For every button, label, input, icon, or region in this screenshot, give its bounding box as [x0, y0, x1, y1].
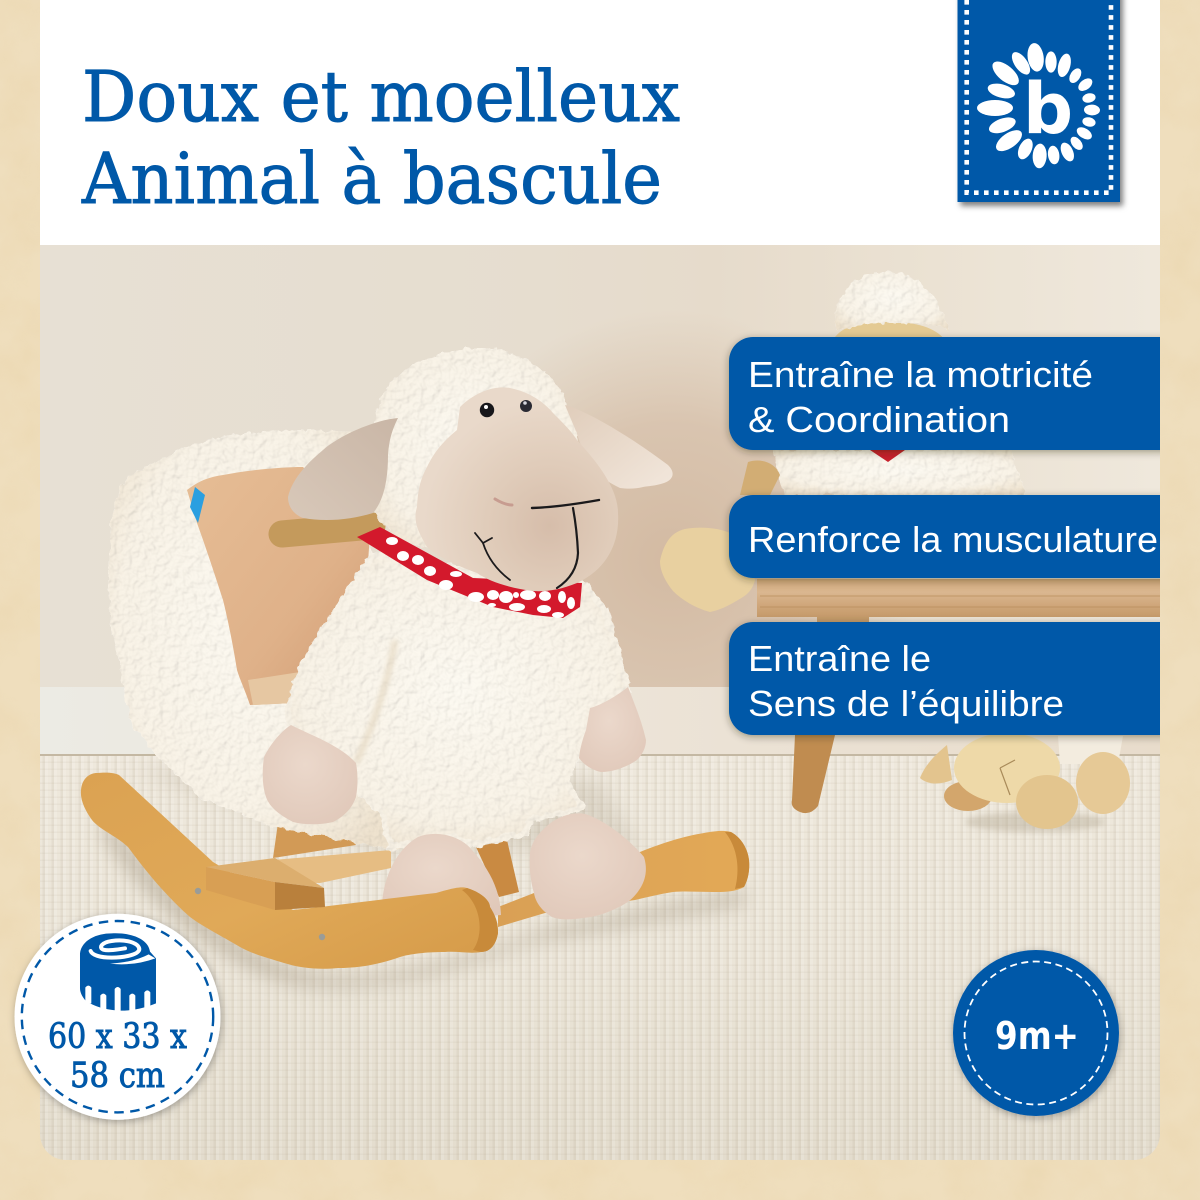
carpet	[40, 754, 1160, 1160]
tape ticks	[85, 986, 150, 1012]
left hand	[263, 725, 358, 824]
size badge	[14, 914, 220, 1120]
wooden handle	[282, 526, 372, 534]
pill background	[729, 495, 1170, 578]
right ear	[565, 405, 673, 489]
seat bottom	[248, 672, 300, 705]
tape body	[80, 933, 156, 1011]
size circle	[14, 914, 220, 1120]
feature: motor skills	[729, 337, 1170, 450]
seat post	[273, 823, 356, 858]
wall	[40, 245, 1160, 690]
arm crease	[356, 640, 395, 763]
pill background	[729, 622, 1170, 735]
pill text: Sens de l’équilibre	[748, 683, 1064, 724]
size text: 60 x 33 x	[48, 1017, 187, 1057]
eyes	[480, 400, 532, 417]
size text	[48, 1017, 187, 1096]
title line 1: Doux et moelleux	[82, 56, 680, 138]
background sheep paw	[660, 528, 755, 612]
age dashed ring	[964, 962, 1108, 1104]
size dashed ring	[22, 921, 213, 1112]
pill text: & Coordination	[748, 399, 1010, 440]
icon: measuring tape	[80, 933, 156, 1012]
pill text	[748, 354, 1093, 440]
bench top	[757, 579, 1160, 617]
floor shadow	[100, 770, 745, 987]
face	[415, 387, 618, 591]
right foot	[530, 813, 646, 919]
right hand	[579, 687, 646, 772]
background sheep arm	[740, 461, 780, 495]
header panel	[40, 0, 1160, 246]
age badge	[953, 950, 1119, 1116]
pill text: Entraîne le	[748, 638, 931, 679]
product photo	[40, 245, 1170, 1160]
pill text	[748, 638, 1064, 724]
title line 2: Animal à bascule	[81, 138, 662, 220]
bench rear leg	[817, 617, 869, 622]
rear seat beam	[273, 850, 391, 883]
background sheep scarf	[870, 450, 905, 462]
rocking sheep	[81, 348, 749, 969]
rocker screws	[195, 888, 325, 940]
rear support	[476, 840, 519, 897]
background sheep body	[772, 450, 1026, 495]
pill text: Entraîne la motricité	[748, 354, 1093, 395]
baseboard	[40, 687, 1160, 756]
brand logo tag	[958, 0, 1120, 202]
rear rocker end grain	[725, 832, 749, 889]
tape roll edge	[110, 954, 155, 964]
left foot	[382, 834, 501, 920]
head wool	[370, 348, 578, 560]
nose and mouth	[475, 499, 599, 588]
size text: 58 cm	[70, 1056, 165, 1096]
left ear	[288, 418, 398, 520]
feature: balance	[729, 622, 1170, 735]
front rocker	[81, 773, 498, 969]
rocker end grain	[462, 888, 498, 952]
logo background	[958, 0, 1120, 202]
rear rocker	[498, 831, 749, 927]
pill text: Renforce la musculature	[748, 519, 1158, 560]
small toy on floor	[920, 733, 1130, 832]
icon: flower petals	[977, 42, 1100, 169]
feature: muscles	[729, 495, 1170, 578]
pill background	[729, 337, 1170, 450]
seat crossbar	[206, 858, 325, 910]
background sheep toy	[660, 271, 1160, 832]
age circle	[953, 950, 1119, 1116]
seat back cushion	[187, 467, 370, 705]
seat shell	[108, 430, 400, 850]
label tag	[190, 487, 205, 523]
background sheep face	[835, 322, 942, 337]
scarf	[357, 527, 582, 618]
logo letter: b	[1023, 68, 1073, 150]
scarf dots	[386, 537, 575, 618]
title	[81, 56, 680, 220]
body	[287, 555, 628, 847]
age text: 9m+	[995, 1014, 1079, 1058]
logo stitching	[967, 0, 1111, 193]
tape spiral	[91, 940, 139, 958]
background sheep head	[835, 271, 950, 331]
bench front leg	[792, 735, 835, 813]
